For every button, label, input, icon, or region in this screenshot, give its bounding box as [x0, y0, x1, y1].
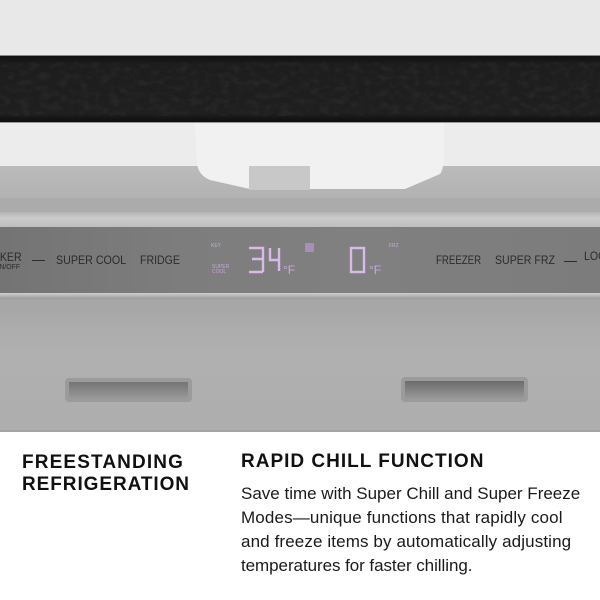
white dispenser bracket	[198, 166, 443, 190]
label: freezer: FREEZER	[436, 255, 481, 267]
grey ledge	[0, 166, 600, 198]
black textured handle	[0, 55, 600, 123]
light trim strip	[0, 212, 600, 227]
lower drawer surface	[0, 299, 600, 431]
left handle slot	[65, 378, 192, 402]
heading: freestanding refrigeration: FREESTANDING	[22, 452, 184, 473]
dash right	[564, 261, 577, 262]
label: super cool: SUPER COOL	[56, 255, 126, 267]
label: fridge: FRIDGE	[140, 255, 180, 267]
label: super cool indicator	[212, 264, 229, 275]
label: frz: FRZ	[389, 243, 399, 249]
freezer degree unit: °F	[369, 263, 381, 277]
body text: Save time with Super Chill and Super Freeze	[241, 484, 580, 503]
heading: freestanding refrigeration	[22, 452, 190, 495]
body text	[241, 484, 580, 575]
upper door panel	[0, 0, 600, 55]
product photo	[0, 0, 600, 432]
body text: and freeze items by automatically adjusting	[241, 532, 571, 551]
body text: Modes—unique functions that rapidly cool	[241, 508, 563, 527]
label: super cool indicator: SUPER	[212, 264, 229, 270]
lock icon	[305, 243, 314, 252]
right handle slot	[401, 377, 528, 402]
fridge temperature digits	[249, 246, 280, 274]
dash left	[32, 260, 45, 261]
body text: temperatures for faster chilling.	[241, 556, 472, 575]
wall below handle	[0, 123, 600, 166]
trim band upper	[0, 198, 600, 212]
fridge degree unit: °F	[283, 263, 295, 277]
label: super frz: SUPER FRZ	[495, 255, 555, 267]
heading: freestanding refrigeration: REFRIGERATION	[22, 474, 190, 495]
panel lower trim	[0, 293, 600, 299]
drawer bottom edge	[0, 430, 600, 432]
heading: rapid chill function: RAPID CHILL FUNCTION	[241, 451, 484, 472]
control panel	[0, 227, 600, 293]
label: key: KEY	[211, 243, 221, 249]
freezer temperature digit	[350, 246, 366, 274]
label: super cool indicator: COOL	[212, 269, 226, 275]
